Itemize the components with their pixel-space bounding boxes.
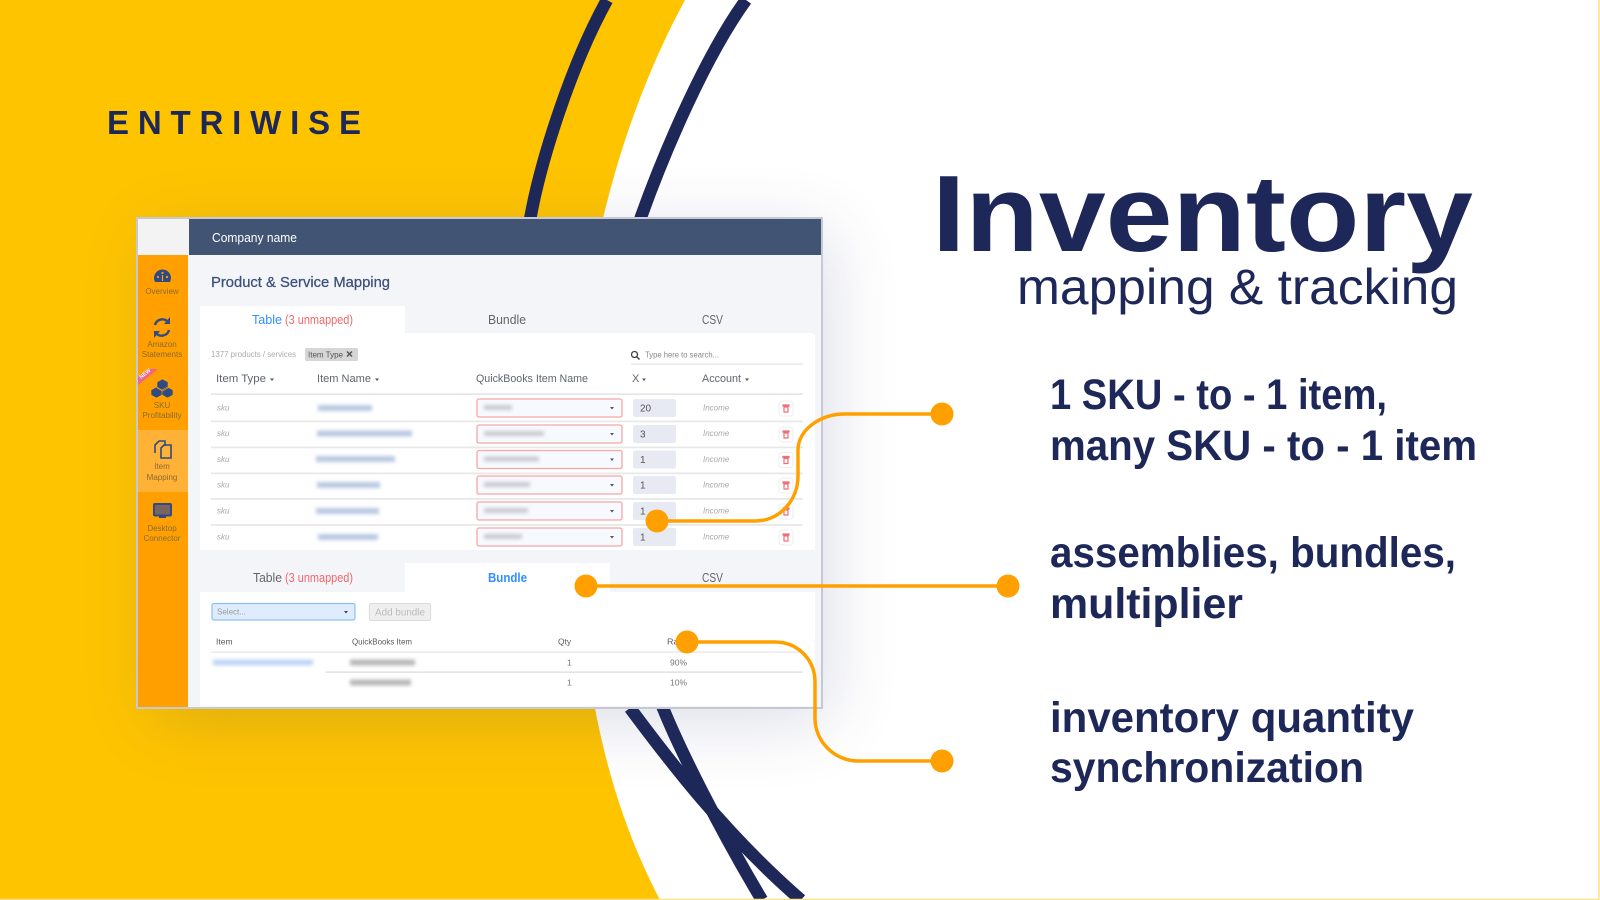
row 2 (217, 425, 793, 443)
lower tabs (253, 563, 724, 593)
nav: SKU Profitability: Profitability (142, 411, 182, 420)
navy arc on yellow field (521, 0, 801, 900)
bundle select (212, 604, 355, 620)
nav: Desktop Connector (144, 504, 181, 543)
table card (200, 333, 815, 550)
table header row: X (632, 373, 640, 385)
nav: Desktop Connector: Connector (144, 534, 181, 543)
connector: bundles (574, 574, 1020, 598)
row 5 (217, 502, 793, 520)
row 5: Income (703, 506, 730, 516)
panel shadow (150, 232, 830, 722)
nav: Item Mapping (147, 441, 177, 482)
row 5: 1 (640, 506, 646, 518)
nav: Desktop Connector: Desktop (147, 524, 177, 533)
nav: Overview (145, 270, 179, 296)
top tabs: Table (252, 313, 282, 327)
row 6 (217, 528, 793, 546)
row 4 (217, 476, 793, 494)
heading: Product & Service Mapping: Product & Service Mapping (211, 275, 390, 291)
connector: quantity sync (676, 630, 954, 772)
row 1: Income (703, 404, 730, 412)
feature: SKU mapping: many SKU - to - 1 item (1050, 422, 1477, 470)
navy arc pair on white area (616, 0, 801, 900)
bundle table: 1 (567, 658, 572, 668)
row 4: 1 (640, 480, 646, 492)
bundle select: Select... (217, 608, 246, 616)
row dividers (211, 420, 803, 526)
feature: inventory sync: synchronization (1050, 744, 1364, 792)
row 1: 20 (640, 404, 652, 414)
bundle table: Rate (667, 636, 686, 646)
logo: ENTRIWISE: ENTRIWISE (107, 104, 361, 141)
nav: Amazon Statements: Amazon (147, 340, 177, 349)
bundle table: 10% (670, 678, 687, 688)
row 4: Income (703, 480, 730, 490)
table toolbar: Item Type (308, 350, 344, 360)
nav: SKU Profitability: SKU (154, 401, 170, 410)
top bar with company name (189, 219, 821, 255)
row 2: 3 (640, 430, 646, 440)
button: Add bundle (370, 604, 430, 620)
ribbon: NEW: NEW (139, 367, 153, 381)
table header row: QuickBooks Item Name (476, 373, 588, 385)
feature: assemblies (1050, 529, 1456, 628)
sidebar active item background (138, 430, 188, 492)
nav: Item Mapping: Item (154, 462, 170, 471)
lower tabs: CSV (702, 571, 724, 585)
bundle table: 90% (670, 658, 687, 668)
sidebar (138, 255, 188, 707)
bundle table: Item (216, 636, 233, 646)
lower tabs: Table (253, 571, 282, 585)
feature: inventory sync (1050, 694, 1414, 792)
feature: assemblies: multiplier (1050, 580, 1243, 628)
bundle table: 1 (567, 678, 572, 688)
row 1 (217, 399, 793, 417)
row 2: sku (217, 429, 230, 438)
bundle card (200, 592, 815, 706)
feature: SKU mapping (1050, 371, 1477, 470)
row 3: Income (703, 455, 730, 464)
subtitle: mapping & tracking (1017, 259, 1458, 315)
nav: SKU Profitability (142, 379, 182, 420)
feature: inventory sync: inventory quantity (1050, 694, 1414, 742)
table toolbar: Type here to search... (645, 350, 719, 360)
row 3: sku (217, 455, 230, 464)
app logo area (138, 219, 188, 255)
top tabs: Bundle (488, 313, 526, 327)
nav: Amazon Statements (142, 317, 182, 359)
nav: Amazon Statements: Statements (142, 350, 182, 359)
bundle table (211, 636, 803, 688)
table header row: Item Type (216, 373, 266, 385)
table toolbar (211, 348, 803, 365)
lower tabs: (3 unmapped) (285, 571, 353, 585)
lower tabs: Bundle (488, 571, 527, 585)
row 4: sku (217, 480, 230, 490)
button: Add bundle: Add bundle (375, 608, 425, 618)
feature: SKU mapping: 1 SKU - to - 1 item, (1050, 371, 1387, 419)
top tabs: (3 unmapped) (285, 313, 353, 327)
row 5: sku (217, 506, 230, 516)
top tabs: CSV (702, 313, 724, 327)
row 6: Income (703, 532, 730, 542)
background: white curved area (575, 0, 1600, 900)
connector: SKU mapping (646, 402, 954, 532)
top tabs (200, 306, 724, 334)
table toolbar: 1377 products / services (211, 350, 296, 359)
panel: app screenshot (137, 218, 822, 708)
top bar with company name: Company name (212, 230, 297, 245)
row 6: sku (217, 532, 230, 542)
row 3 (217, 450, 793, 468)
row 1: sku (217, 404, 230, 412)
table header row: Item Name (317, 373, 371, 385)
nav: Overview: Overview (145, 287, 179, 296)
bundle table: QuickBooks Item (352, 636, 412, 646)
nav: Item Mapping: Mapping (147, 473, 177, 482)
row 6: 1 (640, 532, 646, 544)
ribbon: NEW (138, 367, 158, 385)
feature: assemblies: assemblies, bundles, (1050, 529, 1456, 577)
table header row (211, 373, 803, 395)
table header row: Account (702, 373, 741, 385)
bundle table: Qty (558, 636, 572, 646)
row 3: 1 (640, 455, 646, 466)
title: Inventory (932, 153, 1473, 275)
row 2: Income (703, 429, 730, 438)
